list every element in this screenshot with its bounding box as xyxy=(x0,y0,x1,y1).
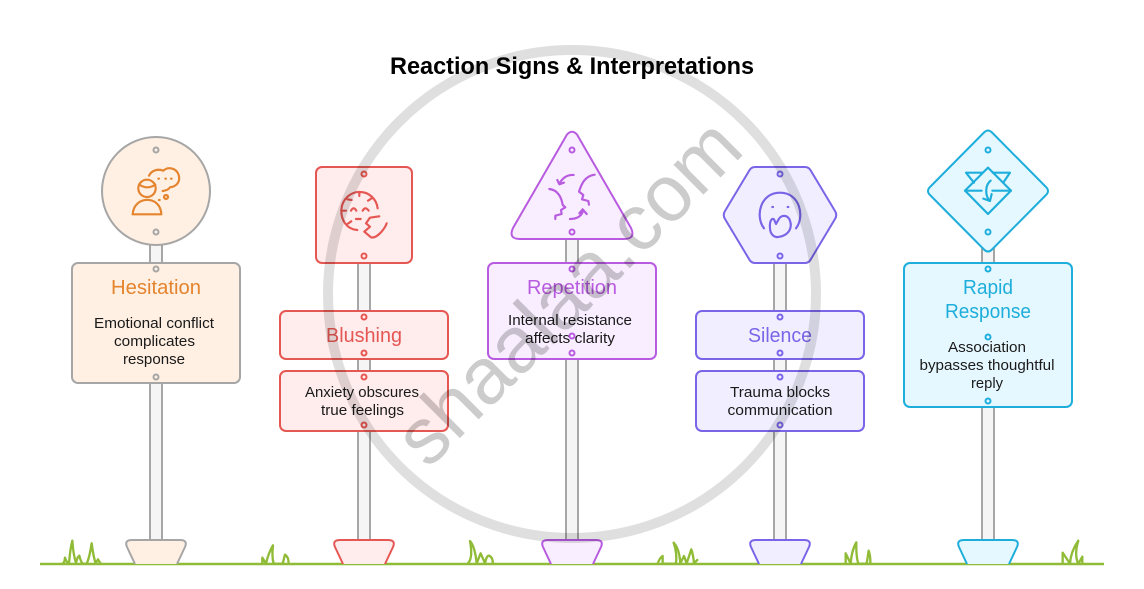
watermark: shaalaa.com xyxy=(377,101,758,482)
diamond sign head xyxy=(928,130,1048,252)
hexagonal sign head xyxy=(724,167,836,263)
icon: blushing face xyxy=(341,192,387,237)
message box xyxy=(280,371,448,431)
square sign head xyxy=(316,167,412,263)
body text: Emotional conflict xyxy=(94,316,214,332)
body text: bypasses thoughtful xyxy=(920,358,1054,374)
body text: Trauma blocks xyxy=(730,385,830,401)
body text xyxy=(305,385,419,419)
heading xyxy=(945,277,1031,323)
sign: Silence xyxy=(696,167,864,564)
rivets xyxy=(778,172,782,428)
base xyxy=(958,540,1018,564)
body text: true feelings xyxy=(321,403,404,419)
rivets xyxy=(362,172,366,428)
message box xyxy=(696,371,864,431)
body text: Anxiety obscures xyxy=(305,385,419,401)
heading: Silence xyxy=(748,325,812,347)
body text xyxy=(508,313,632,347)
body text: reply xyxy=(971,376,1004,392)
sign: Repetition xyxy=(488,132,656,564)
icon: star with arrow xyxy=(965,168,1011,214)
sign: Rapid Response xyxy=(904,130,1072,564)
icon: face covering mouth xyxy=(760,193,800,237)
rivets xyxy=(986,148,990,404)
post xyxy=(150,240,162,541)
message box xyxy=(72,263,240,383)
body text: Internal resistance xyxy=(508,313,632,329)
icon: two faces with cycle arrows xyxy=(549,175,595,219)
title: Reaction Signs & Interpretations xyxy=(390,53,754,80)
message box xyxy=(904,263,1072,407)
post xyxy=(982,245,994,541)
post xyxy=(358,258,370,541)
post xyxy=(774,258,786,541)
body text xyxy=(728,385,832,419)
body text: complicates xyxy=(114,334,195,350)
post xyxy=(566,235,578,541)
heading: Hesitation xyxy=(111,277,201,299)
body text: Association xyxy=(948,340,1026,356)
rivets xyxy=(154,148,158,380)
message box xyxy=(488,263,656,359)
heading box xyxy=(696,311,864,359)
base xyxy=(750,540,810,564)
base xyxy=(126,540,186,564)
heading: Repetition xyxy=(527,277,617,299)
base xyxy=(542,540,602,564)
heading: Blushing xyxy=(326,325,402,347)
body text: communication xyxy=(728,403,832,419)
rivets xyxy=(570,148,574,356)
base xyxy=(334,540,394,564)
sign: Hesitation xyxy=(72,137,240,564)
heading: Rapid xyxy=(963,277,1013,299)
heading box xyxy=(280,311,448,359)
body text xyxy=(94,316,214,368)
heading: Response xyxy=(945,301,1031,323)
sign: Blushing xyxy=(280,167,448,564)
ground with grass xyxy=(40,541,1104,564)
icon: person with thought bubble xyxy=(133,168,179,214)
body text: affects clarity xyxy=(525,331,616,347)
body text: response xyxy=(123,352,185,368)
body text xyxy=(920,340,1054,392)
circular sign head xyxy=(102,137,210,245)
triangular sign head xyxy=(512,132,632,239)
